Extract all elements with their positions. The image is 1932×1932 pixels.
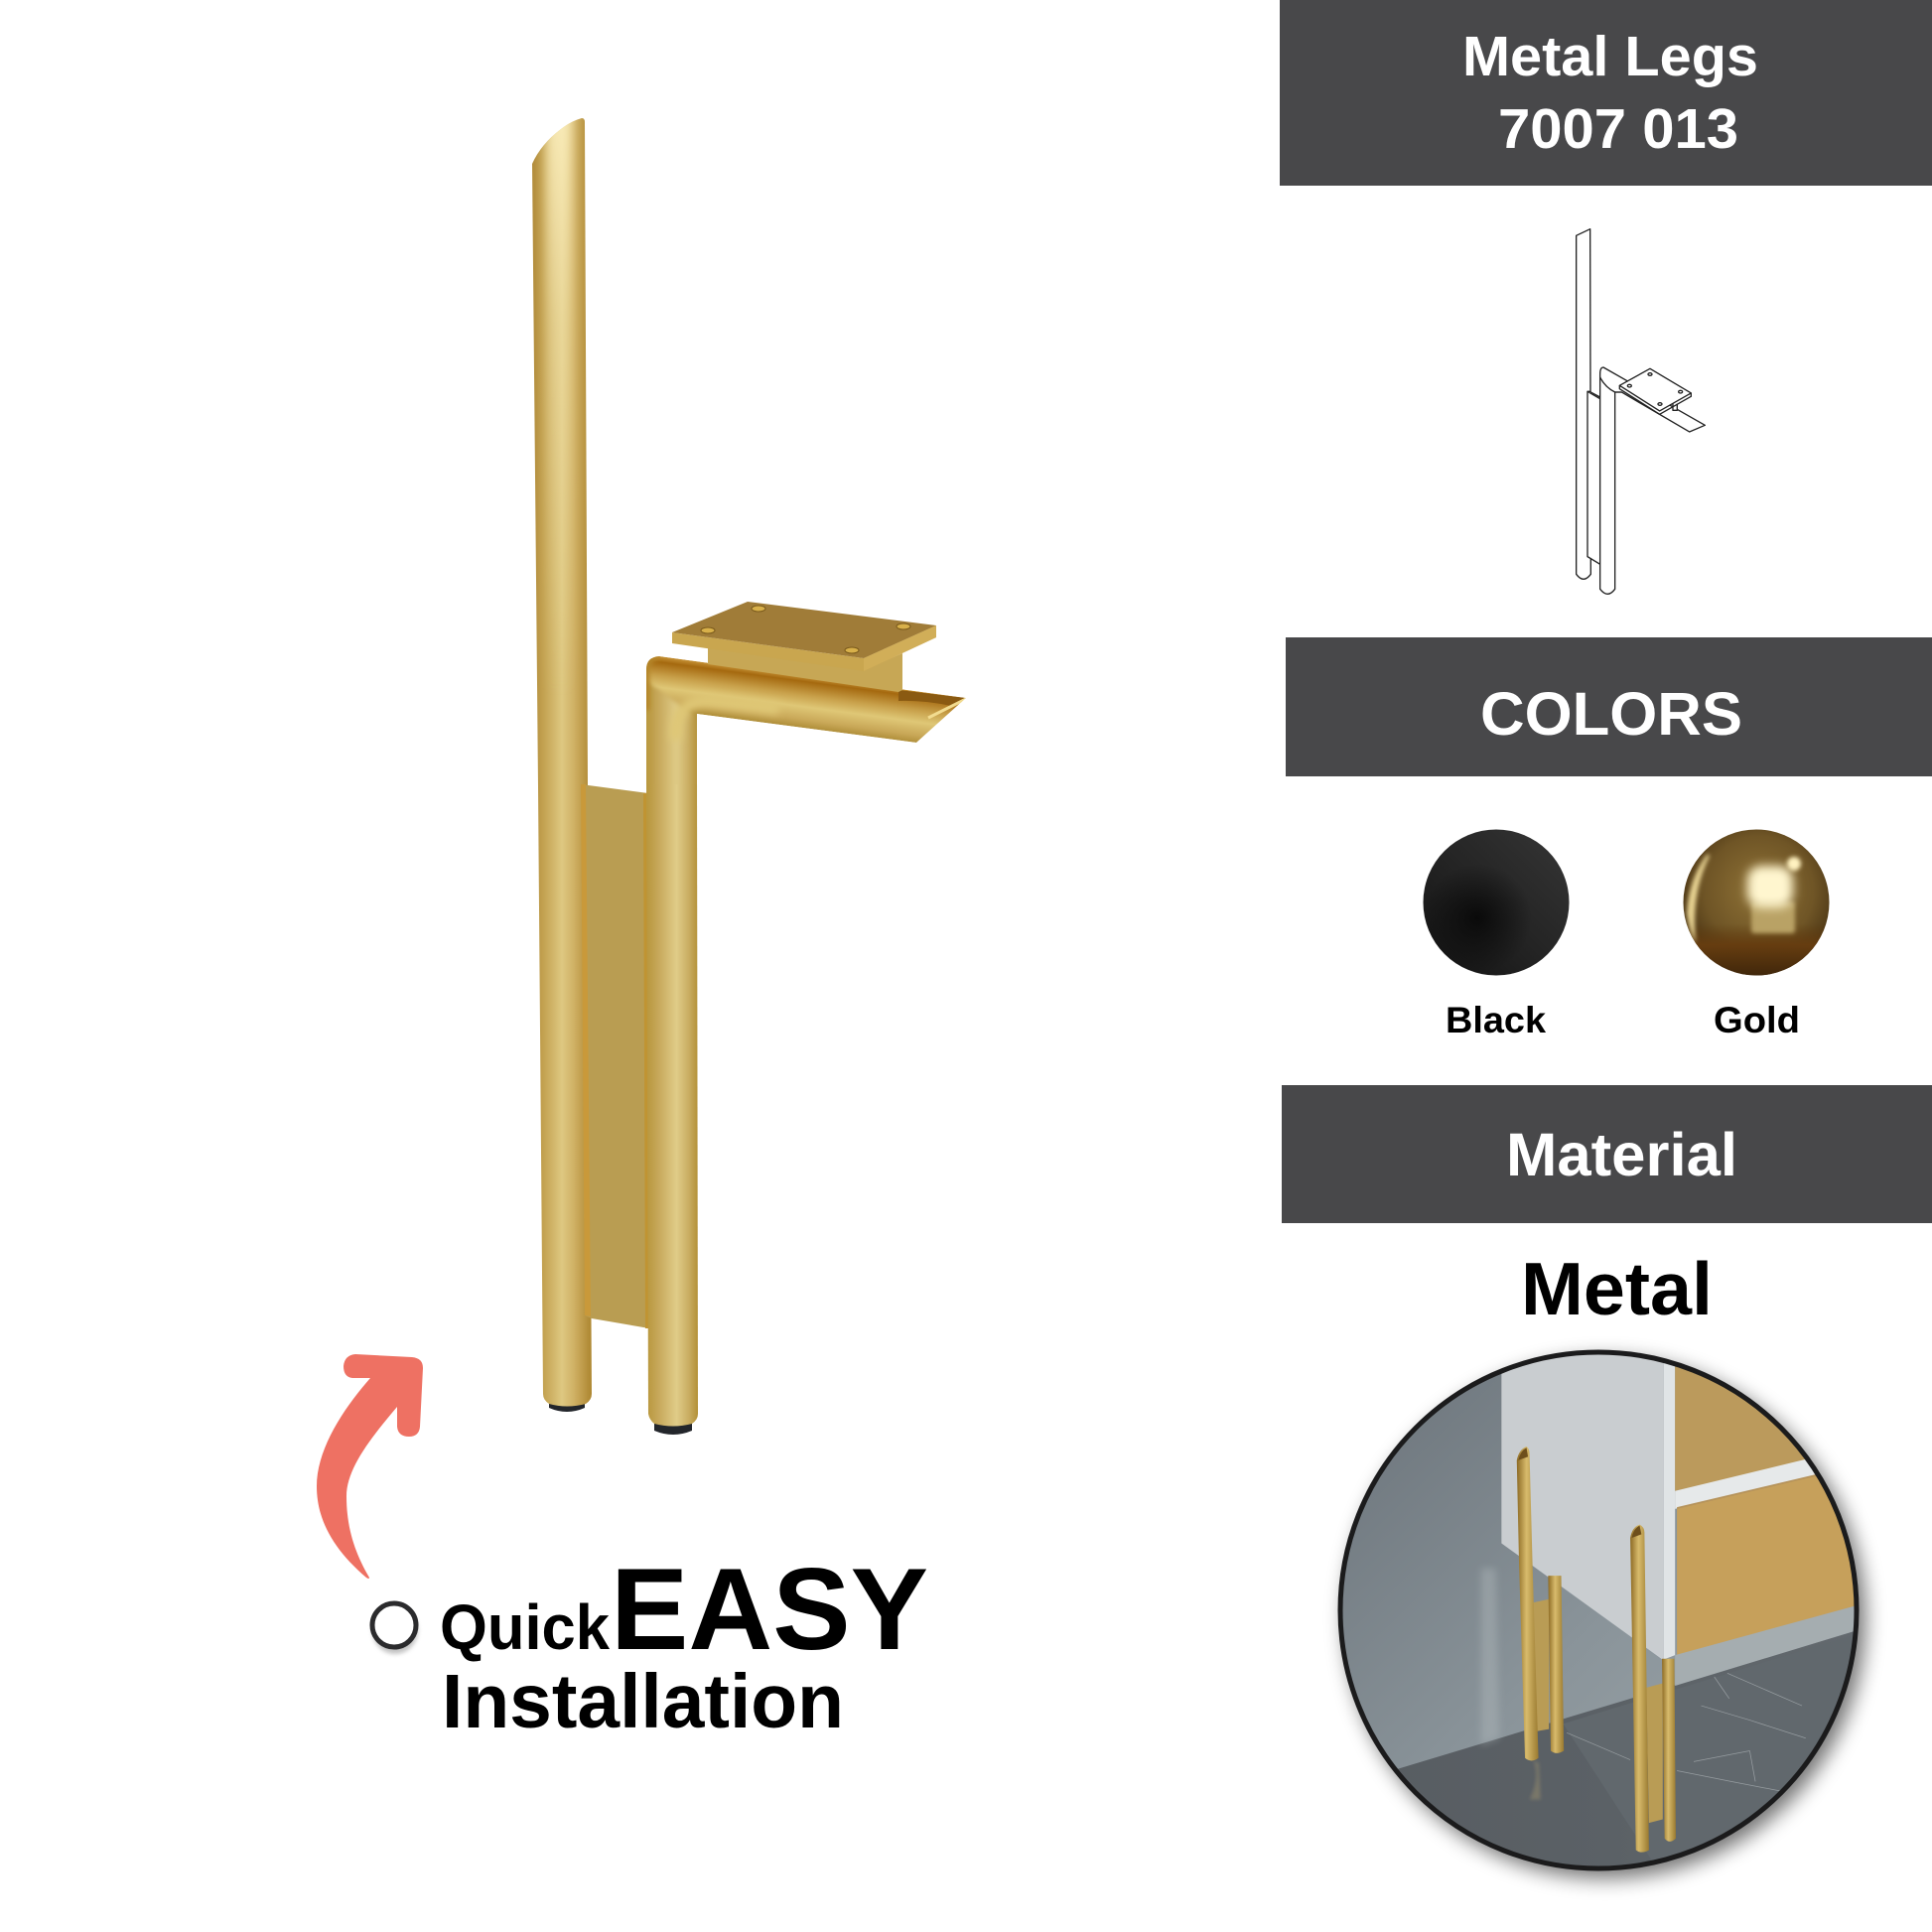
arrow pointing to leg [317,1354,423,1579]
material banner [1282,1085,1932,1223]
product photo: gold metal leg [526,109,966,1435]
title line 2: 7007 013 [1498,97,1738,161]
word: Installation: Installation [442,1659,844,1744]
colors heading: COLORS [1480,680,1742,748]
title line 1: Metal Legs [1462,25,1758,88]
bullet ring [372,1603,418,1654]
label: Black: Black [1446,999,1546,1040]
bent arm [640,656,966,794]
material heading: Material [1506,1121,1737,1188]
word: Quick: Quick [440,1591,610,1663]
line drawing of the leg [1577,229,1705,594]
second tube [646,774,698,1426]
photo leg left [1517,1447,1564,1760]
colors banner [1286,637,1932,776]
mounting plate with holes [672,602,936,671]
swatch: black [1423,829,1570,1040]
leg foot left [549,1398,585,1412]
room photo inset [1320,1330,1906,1896]
caption: quick easy installation [440,1544,928,1744]
mounting block [708,647,902,692]
title banner [1280,0,1932,186]
connecting panel [581,784,649,1328]
label: Gold: Gold [1714,999,1800,1040]
swatch: gold [1683,829,1830,1040]
word: EASY: EASY [611,1544,928,1674]
leg foot right [654,1420,692,1435]
material value: Metal [1521,1247,1713,1330]
photo leg right [1630,1525,1676,1853]
long tube with angled top [532,118,592,1406]
